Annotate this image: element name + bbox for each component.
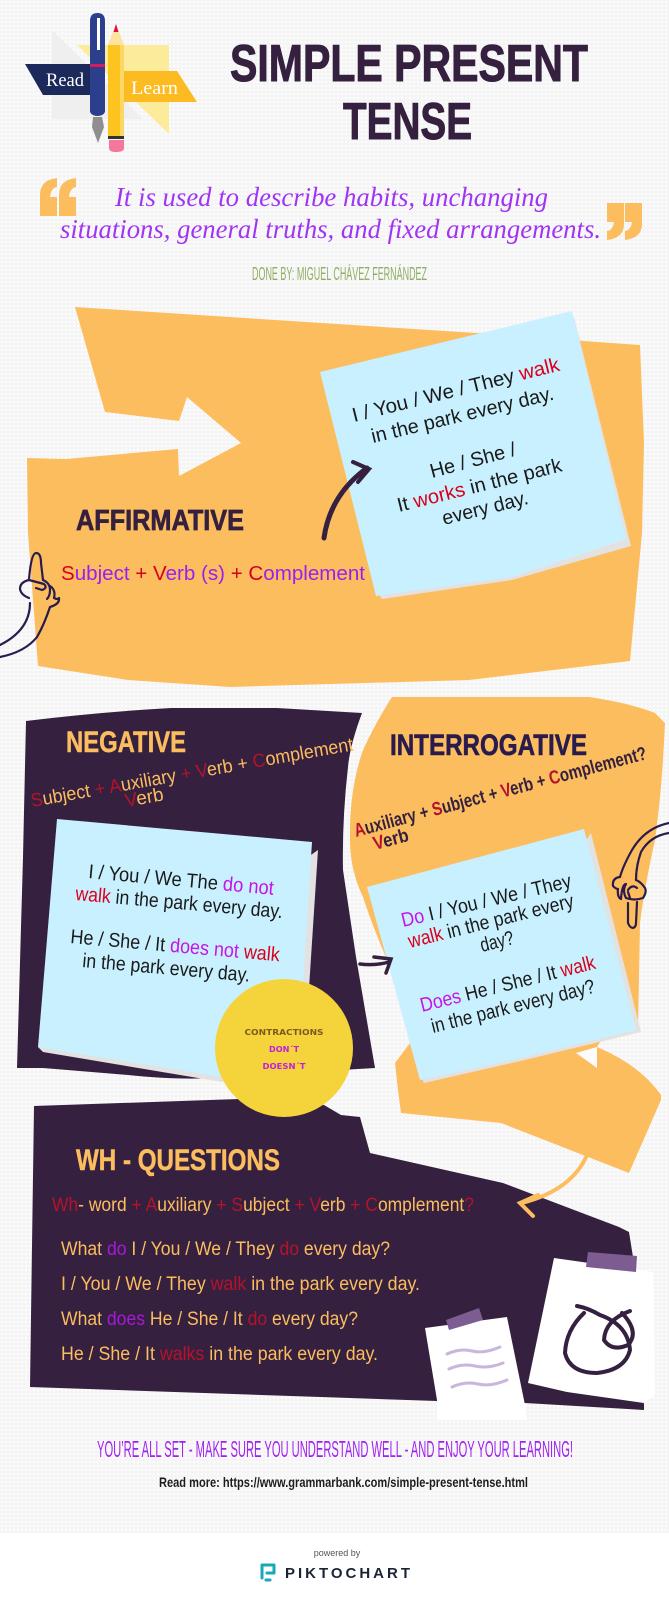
note card: He / She / It does not walk <box>70 926 282 966</box>
formula: Subject + Verb (s) + Complement <box>61 563 365 585</box>
note card: He / She / <box>428 439 519 483</box>
footer: powered by piktochart: powered by <box>314 1548 361 1558</box>
callout: contractions: DON´T <box>269 1045 300 1054</box>
note card: every day. <box>440 487 531 530</box>
formula: Wh- word + Auxiliary + Subject + Verb + Complement? <box>52 1195 474 1216</box>
note card <box>320 311 631 599</box>
footer: powered by piktochart: PIKTOCHART <box>285 1565 410 1582</box>
note card <box>367 829 641 1083</box>
heading: wh-questions: WH - QUESTIONS <box>76 1144 280 1177</box>
icon: piktochart logo <box>262 1565 274 1580</box>
banner: read: Read <box>46 70 84 91</box>
examples: I / You / We / They walk in the park every day. <box>61 1274 420 1295</box>
examples: He / She / It walks in the park every day. <box>61 1344 378 1365</box>
callout: contractions: DOESN´T <box>262 1062 306 1071</box>
callout: contractions <box>215 979 353 1117</box>
examples <box>61 1239 420 1365</box>
icon: opening quote mark <box>40 178 76 216</box>
small arrow to interrogative <box>360 957 391 973</box>
footer: powered by piktochart <box>262 1548 410 1582</box>
large paper note <box>528 1252 655 1403</box>
panel shape with arrow cut-out <box>27 307 644 687</box>
icon: pencil <box>108 24 124 152</box>
arrow to note <box>324 462 369 538</box>
quote text <box>60 182 601 244</box>
note card: in the park every day. <box>369 383 556 448</box>
icon: pen <box>90 13 105 143</box>
banner: learn: Learn <box>131 78 179 99</box>
formula: Auxiliary + Subject + Verb + Complement? <box>352 743 649 842</box>
quote text: It is used to describe habits, unchanging <box>114 182 548 212</box>
icon: closing quote mark <box>607 203 642 240</box>
note card: day? <box>478 927 516 957</box>
source link: Read more: https://www.grammarbank.com/simple-present-tense.html <box>159 1474 528 1490</box>
icon: pointing hand <box>0 553 59 657</box>
banner: read <box>25 64 92 95</box>
panel shape <box>30 1099 644 1410</box>
note card: Do I / You / We / They <box>399 870 573 932</box>
panel shape <box>17 708 375 1079</box>
panel: affirmative <box>0 307 644 687</box>
formula: Verb <box>123 784 165 812</box>
examples: What do I / You / We / They do every day? <box>61 1239 390 1260</box>
heading: interrogative: INTERROGATIVE <box>390 729 587 762</box>
note card: in the park every day. <box>82 950 251 987</box>
title: TENSE <box>343 93 472 151</box>
panel: interrogative <box>350 697 669 1173</box>
note card: I / You / We / They walk <box>350 354 563 427</box>
title <box>230 35 588 151</box>
heading: affirmative: AFFIRMATIVE <box>76 505 244 537</box>
callout: contractions: CONTRACTIONS <box>244 1028 324 1037</box>
note card: walk in the park every day. <box>74 883 284 923</box>
icon: hand pointing down <box>613 823 669 928</box>
note card: in the park every day? <box>429 976 597 1038</box>
note card: It works in the park <box>395 454 565 517</box>
notch <box>576 1047 597 1068</box>
note card <box>38 819 318 1082</box>
panel: wh-questions <box>30 1099 655 1420</box>
heading: negative: NEGATIVE <box>66 726 186 759</box>
curved arrow <box>520 1155 587 1216</box>
banner: learn <box>124 71 197 102</box>
note card: I / You / We The do not <box>88 861 275 900</box>
note card: walk in the park every <box>405 890 576 953</box>
formula: Verb <box>371 825 411 855</box>
panel: negative <box>17 708 391 1082</box>
small paper note <box>425 1308 527 1420</box>
panel shape <box>350 697 665 1173</box>
quote text: situations, general truths, and fixed arrangements. <box>60 214 601 244</box>
formula: Subject + Auxiliary + Verb + Complement <box>29 734 356 812</box>
logo: read and learn <box>25 13 197 152</box>
note card: Does He / She / It walk <box>418 952 599 1017</box>
examples: What does He / She / It do every day? <box>61 1309 358 1330</box>
text: DONE BY: MIGUEL CHÁVEZ FERNÁNDEZ <box>252 264 427 284</box>
